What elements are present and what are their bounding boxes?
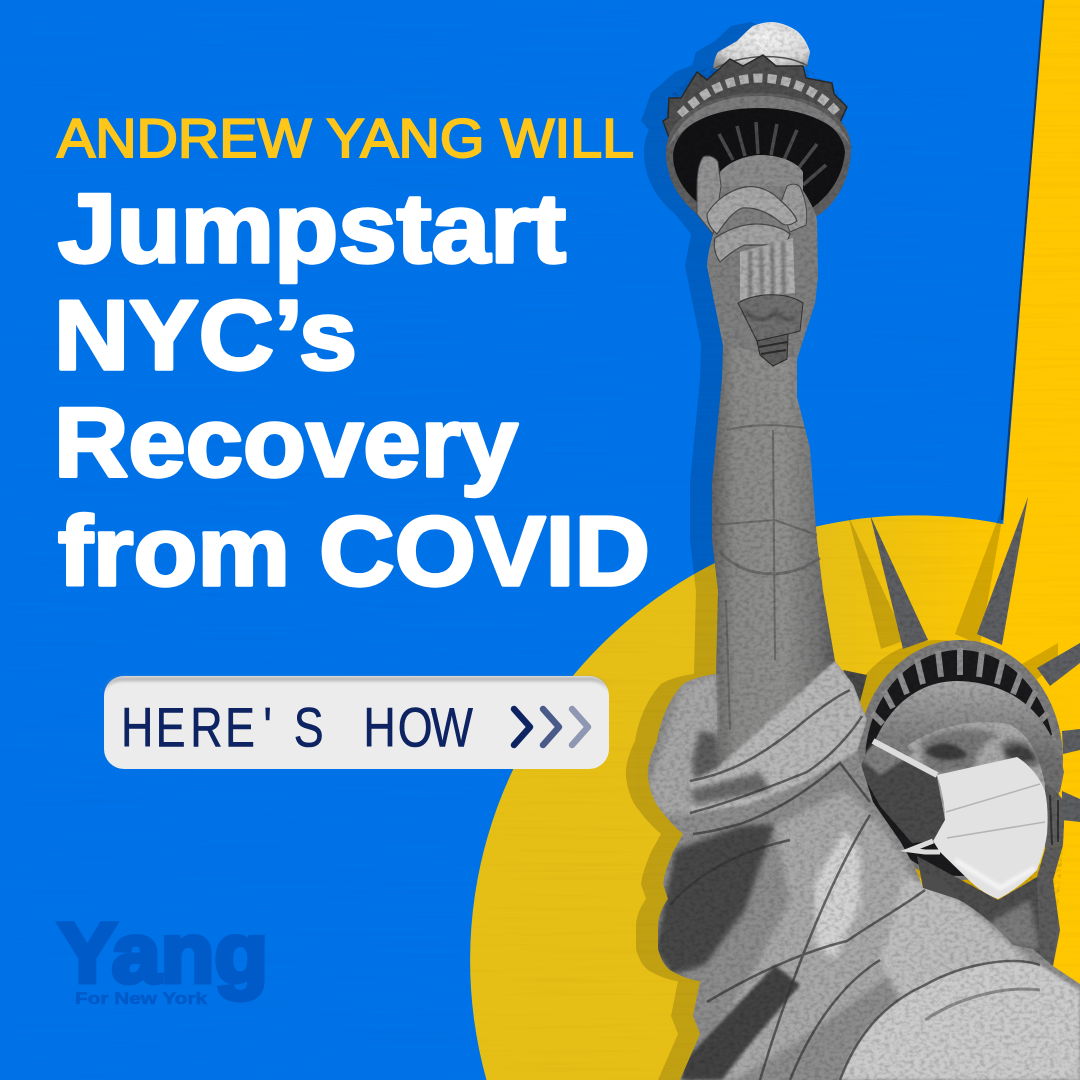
- button label: HERE'S HOW: [121, 696, 473, 759]
- statue drop shadow: [626, 22, 1058, 1080]
- robe drapery: [648, 661, 1080, 1080]
- button: here's how: [104, 676, 609, 769]
- logo: Yang for New York: Yang: [58, 906, 268, 1000]
- crown diadem: [857, 640, 1063, 880]
- torch: railing: [663, 55, 851, 148]
- raised arm: [707, 250, 840, 775]
- robe shading and folds: [648, 661, 1080, 1080]
- headline kicker: ANDREW YANG WILL: [57, 107, 634, 169]
- face mask: [873, 741, 1048, 899]
- headline: [54, 173, 650, 606]
- headline line 2: NYC’s: [54, 280, 357, 390]
- background: yellow slanted band: [960, 0, 1080, 1080]
- yellow band edge line: [1002, 0, 1044, 520]
- arm details: [712, 425, 820, 730]
- torch collar: [720, 155, 803, 215]
- crown spikes: [843, 497, 1080, 822]
- headline line 3: Recovery: [54, 387, 518, 497]
- headline line 1: Jumpstart: [58, 173, 566, 283]
- statue stone texture: [640, 0, 1080, 1080]
- yellow circle: [470, 515, 1080, 1080]
- head: hair, face and neck: [860, 681, 1065, 966]
- dark cheek and hair beside mask: [860, 743, 945, 843]
- headline line 4: from COVID: [58, 496, 650, 606]
- hand gripping torch: [697, 156, 818, 366]
- chevron arrows: [514, 709, 588, 745]
- torch: flame: [713, 22, 810, 69]
- torch: balcony dish: [666, 93, 851, 216]
- statue of liberty with mask: [640, 0, 1080, 1080]
- logo tagline: For New York: [75, 989, 208, 1008]
